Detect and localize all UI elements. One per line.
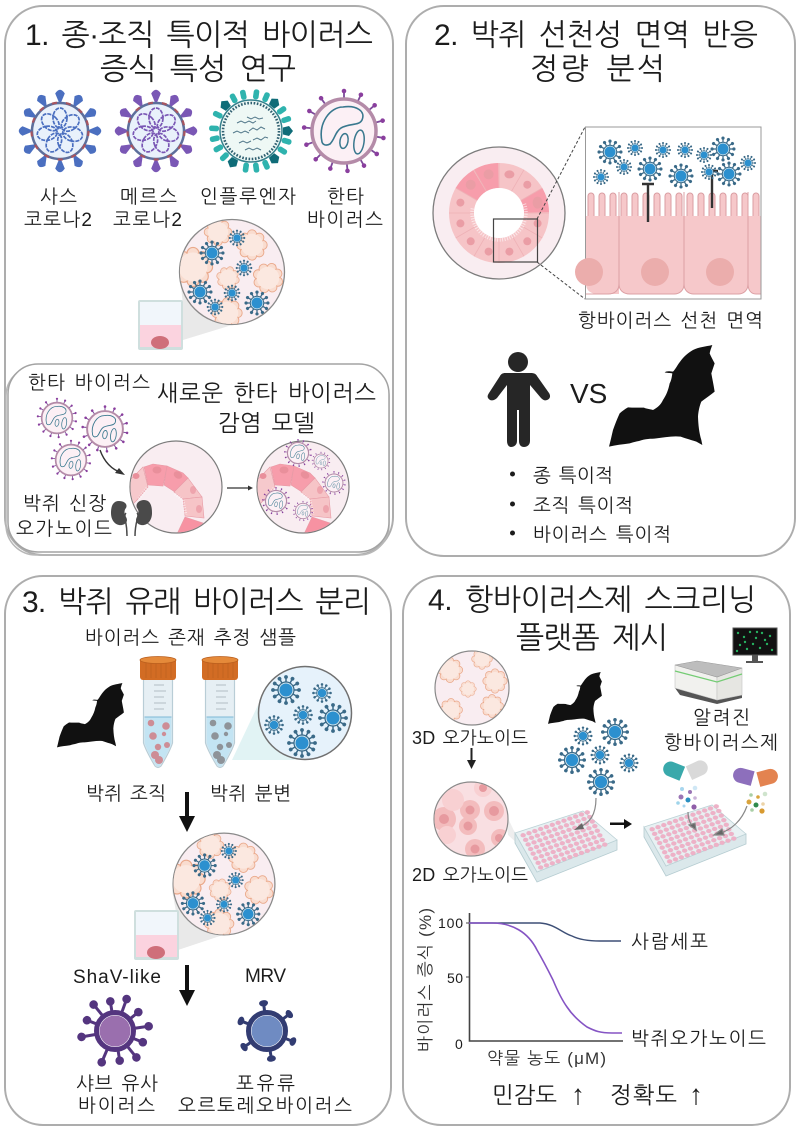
tube: bat feces [202, 656, 238, 768]
arrow [467, 748, 476, 769]
virus name labels: ShaV-like [73, 967, 161, 988]
hantavirus label: 한타 바이러스 [28, 373, 150, 394]
curve: human cells [469, 923, 621, 941]
virus labels: 한타 [327, 187, 364, 208]
virus name labels: MRV [245, 966, 286, 987]
zoom cone [232, 705, 295, 760]
inner panel heading: 감염 모델 [218, 410, 315, 436]
axis ticks: 50 [447, 970, 463, 986]
infected organoid magnified view [173, 218, 287, 328]
bat organoid label: 박쥐오가노이드 [631, 1029, 766, 1050]
axis ticks: 0 [455, 1036, 463, 1052]
icon: bat silhouette [609, 345, 715, 447]
tube labels [86, 784, 291, 805]
2D organoid view [432, 779, 509, 859]
panel 2: bat innate immune response [406, 6, 795, 556]
inner panel heading [157, 380, 376, 436]
sample heading: 바이러스 존재 추정 샘플 [85, 628, 296, 649]
axis ticks [438, 915, 463, 1052]
inner panel heading: 새로운 한타 바이러스 [157, 380, 376, 406]
well plate: drug treatment [644, 803, 746, 876]
virus labels: 바이러스 [307, 210, 383, 231]
arrow [179, 965, 195, 1006]
3D organoid view [435, 649, 509, 725]
panel 2 title: 정량 분석 [530, 53, 665, 86]
virus full names: 샤브 유사 [76, 1074, 158, 1095]
organoid cross-section [433, 147, 565, 279]
bat kidney organoid label: 박쥐 신장 [23, 494, 106, 515]
panel 4: antiviral screening platform [403, 576, 790, 1125]
panel 4 title: 4. 항바이러스제 스크리닝 [428, 584, 756, 617]
curve: bat organoids [469, 923, 622, 1033]
panel 2 title [434, 19, 758, 86]
panel 1 title: 1. 종·조직 특이적 바이러스 [25, 19, 373, 52]
bat kidney organoid label [16, 494, 112, 540]
arrow: infection [100, 450, 125, 475]
icon: human [488, 352, 550, 447]
sensitivity and accuracy: 정확도 [610, 1082, 677, 1108]
specificity bullet list: 종 특이적 [533, 466, 613, 487]
icon: bat silhouette [57, 683, 124, 747]
panel 2 title: 2. 박쥐 선천성 면역 반응 [434, 19, 758, 52]
virus labels: 코로나2 [113, 210, 182, 231]
x axis label: 약물 농도 (μM) [487, 1049, 606, 1068]
sensitivity and accuracy: ↑ [571, 1079, 585, 1110]
hantavirus group [37, 398, 129, 480]
virus labels: 사스 [40, 187, 77, 208]
arrow: progression [227, 486, 253, 490]
arrows: drugs to plate [688, 806, 747, 835]
icon: monitor [733, 628, 777, 663]
virus labels: 메르스 [120, 187, 177, 208]
dose response chart [416, 908, 766, 1068]
virus labels: 인플루엔자 [200, 187, 296, 208]
3D organoid label: 3D 오가노이드 [412, 728, 528, 748]
tube labels: 박쥐 분변 [210, 784, 291, 805]
virus full names: 오르토레오바이러스 [178, 1096, 352, 1117]
panel 1 title [25, 19, 373, 86]
virus labels: 코로나2 [24, 210, 92, 231]
zoom cone [180, 275, 232, 340]
zoom cone [172, 890, 226, 950]
panel 1: species and tissue specific viral replication [5, 6, 393, 555]
icon: plate reader instrument [675, 661, 742, 704]
selection square and zoom lines [494, 127, 585, 299]
2D organoid label: 2D 오가노이드 [412, 865, 528, 885]
icon: kidneys [111, 500, 152, 536]
well plate: virus infection [515, 809, 617, 882]
tube: bat tissue [140, 656, 176, 768]
panel 3: bat-derived virus isolation [5, 576, 391, 1125]
icon: bat silhouette [548, 672, 602, 724]
icon: hantavirus [302, 89, 386, 173]
panel 1 title: 증식 특성 연구 [100, 53, 296, 86]
icon: capsules and compounds right [731, 766, 780, 814]
inner panel: new hantavirus infection model [6, 364, 389, 555]
organoid culture well [139, 301, 182, 350]
specificity bullet list: 바이러스 특이적 [533, 525, 671, 546]
zoom cone [505, 812, 530, 855]
tube labels: 박쥐 조직 [86, 784, 166, 805]
uninfected kidney organoid [130, 441, 222, 534]
sensitivity and accuracy: 민감도 [492, 1082, 557, 1108]
virus full names: 포유류 [236, 1074, 295, 1095]
icon: ShaV-like virus [77, 994, 154, 1068]
specificity bullet list: 조직 특이적 [533, 496, 633, 517]
known antivirals label [664, 708, 778, 754]
y axis label: 바이러스 증식 (%) [416, 908, 435, 1052]
VS label: VS [570, 378, 607, 409]
innate immunity label: 항바이러스 선천 면역 [578, 311, 763, 332]
icon: SARS-CoV-2 virus [19, 90, 101, 172]
infected kidney organoid [257, 439, 349, 534]
human cell label: 사람세포 [631, 932, 708, 953]
arrow: virus to plate [574, 798, 596, 830]
known antivirals label: 알려진 [693, 708, 750, 729]
virus full names [76, 1074, 352, 1117]
virus name labels [73, 966, 286, 988]
arrow: to drug plate [610, 819, 632, 829]
virus magnified view [258, 666, 352, 760]
virus group [558, 718, 639, 796]
icon: influenza virus [209, 89, 293, 173]
infected organoid magnified view [167, 832, 278, 938]
icon: capsules and compounds left [661, 758, 710, 810]
known antivirals label: 항바이러스제 [664, 733, 778, 754]
panel 3 title: 3. 박쥐 유래 바이러스 분리 [22, 586, 371, 619]
axis ticks: 100 [438, 915, 463, 931]
virus labels [24, 187, 383, 231]
panel 4 title: 플랫폼 제시 [516, 622, 668, 655]
epithelium detail with viruses [575, 127, 761, 299]
bat kidney organoid label: 오가노이드 [16, 519, 112, 540]
specificity bullet list [510, 466, 671, 546]
arrow [179, 792, 195, 832]
icon: mammalian orthoreovirus [236, 1000, 297, 1062]
sensitivity and accuracy [492, 1079, 703, 1110]
icon: MERS coronavirus [115, 90, 197, 172]
virus full names: 바이러스 [78, 1096, 155, 1117]
panel 4 title [428, 584, 756, 655]
culture well [135, 911, 178, 960]
sensitivity and accuracy: ↑ [689, 1079, 703, 1110]
